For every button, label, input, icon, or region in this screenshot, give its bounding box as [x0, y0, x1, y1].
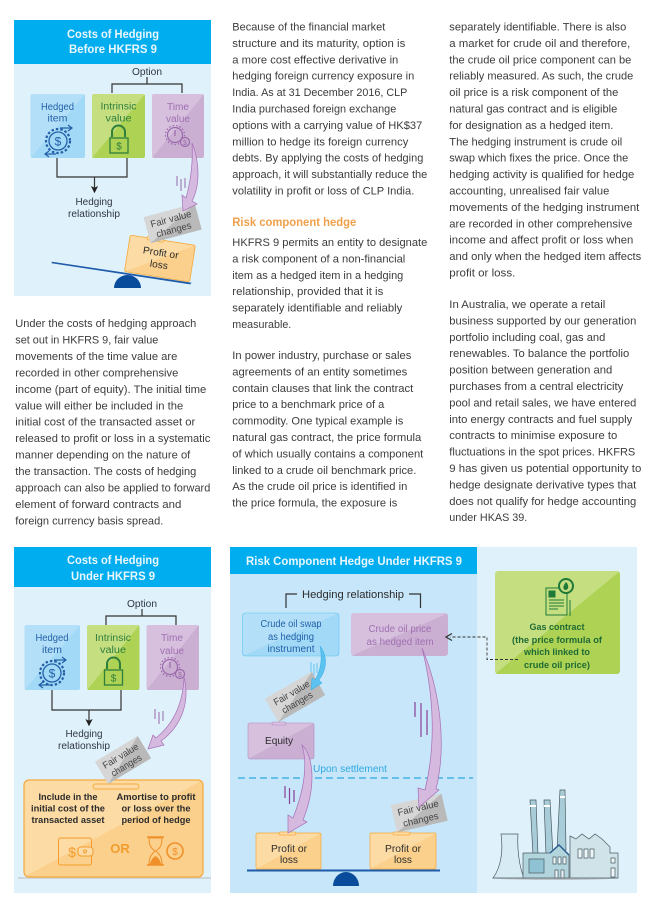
text block: crude oil component: movements of the hedging instrument [449, 202, 639, 214]
text block: Australia: renewables. To balance the portfolio [449, 348, 629, 360]
connector to hedging relationship: relationship [58, 741, 110, 752]
box: fair value changes: Fair value [149, 209, 193, 230]
text block: costs of hedging approach: approach can also be applied to forward [15, 482, 210, 494]
box: gas contract: (the price formula of [512, 635, 603, 646]
text block: costs of hedging approach: Under the costs of hedging approach [15, 318, 196, 330]
box: fair value changes: changes [280, 690, 315, 716]
option bracket [106, 599, 176, 625]
text block: crude oil component: a market for crude oil and therefore, [449, 38, 630, 50]
box: outcomes: Amortise to profit [116, 792, 196, 803]
text: or: OR [110, 841, 130, 856]
text block: Australia: hedge designate derivative types that [449, 479, 636, 491]
text block: option in India [232, 22, 427, 198]
box: outcomes: or loss over the [122, 804, 190, 814]
connector to hedging relationship [57, 158, 127, 220]
box: time value [146, 625, 199, 690]
text block: option in India: India. As at 31 December 2016, CLP [232, 87, 407, 99]
text block: power industry [232, 350, 423, 510]
box: profit or loss [124, 233, 196, 282]
bracket: hedging relationship: Hedging relationship [302, 589, 404, 601]
option bracket [112, 67, 182, 93]
text block: crude oil component: accounting, unrealised fair value [449, 186, 609, 198]
text block: option in India: volatility in profit or loss of CLP India. [232, 186, 414, 198]
text block: power industry: linked to a crude oil benchmark price. [232, 465, 416, 477]
box: crude oil swap: as hedging [268, 632, 314, 643]
panel: risk component hedge under HKFRS 9 [230, 547, 637, 893]
icon: hourglass and coin: $ [172, 847, 178, 858]
icon: hourglass and coin [147, 837, 183, 865]
text block: costs of hedging approach: initial cost of the transacted asset or [15, 417, 196, 429]
text block: power industry: the price formula, the exposure is [232, 498, 398, 510]
box: fair value changes lower: changes [402, 811, 440, 830]
text block: costs of hedging approach: recorded in other comprehensive [15, 367, 178, 379]
text block: crude oil component: hedging activity is qualified for hedge [449, 169, 634, 181]
motion lines: equity [285, 786, 294, 804]
text block: costs of hedging approach: value will either be included in the [15, 400, 183, 412]
box: hedged item: item [48, 114, 68, 124]
box: fair value changes [95, 736, 151, 784]
icon: stopwatch with coin: $ [178, 672, 182, 679]
box: fair value changes: Fair value [272, 679, 312, 708]
text block: option in India: debts. By applying the costs of hedging [232, 153, 423, 165]
text block: risk component definition: relationship, provided that it is [232, 286, 384, 298]
option bracket: Option [127, 599, 157, 610]
box: time value: value [166, 114, 190, 125]
heading: risk component hedge under HKFRS 9: Risk Component Hedge Under HKFRS 9 [246, 554, 462, 568]
text block: option in India: options with a carrying value of HK$37 [232, 120, 422, 132]
illustration: power plant [492, 790, 618, 880]
heading: costs of hedging under HKFRS 9: Under HKFRS 9 [71, 569, 155, 583]
heading: risk component hedge: Risk component hedge [232, 215, 357, 229]
text block: costs of hedging approach: income (part of equity). The initial time [15, 384, 206, 396]
box: crude oil swap: instrument [268, 644, 315, 655]
text block: crude oil component: The hedging instrument is crude oil [449, 136, 622, 148]
box: intrinsic value: value [100, 645, 126, 656]
text block: crude oil component: oil price is a risk component of the [449, 87, 618, 99]
box: outcomes: initial cost of the [31, 804, 105, 814]
icon: padlock: $ [116, 142, 122, 152]
text block: Australia: fluctuations in the spot prices. HKFRS [449, 447, 635, 459]
box: hedged item: item [42, 645, 62, 656]
heading: costs of hedging before HKFRS 9: Costs of Hedging [67, 27, 159, 41]
box: hedged item: Hedged [36, 633, 68, 644]
text block: risk component definition [232, 237, 427, 331]
connector to hedging relationship: relationship [68, 209, 120, 220]
box: outcomes: Include in the [38, 792, 98, 803]
box: intrinsic value [92, 94, 145, 158]
box: intrinsic value: Intrinsic [95, 633, 131, 644]
text block: option in India: structure and its maturity, option is [232, 38, 406, 50]
motion lines [155, 709, 163, 724]
box: fair value changes: changes [155, 220, 193, 240]
box: crude oil swap: Crude oil swap [260, 619, 322, 630]
box: profit or loss: Profit or [142, 245, 180, 262]
box: time value [152, 94, 204, 158]
box: time value: Time [167, 102, 189, 113]
option bracket: Option [132, 67, 162, 78]
arrow: time value to fair value changes [148, 677, 186, 749]
text block: power industry: In power industry, purchase or sales [232, 350, 412, 362]
text block: costs of hedging approach: released to profit or loss in a systematic [15, 433, 211, 445]
arrow: gas contract to crude oil price [446, 634, 518, 660]
text block: Australia: 9 has given us potential opportunity to [449, 463, 641, 475]
text block: Australia: into energy contracts and fuel supply [449, 414, 633, 426]
box: profit or loss right: loss [394, 855, 412, 866]
text block: power industry: contain clauses that link the contract [232, 383, 413, 395]
text block: Australia: does not qualify for hedge accounting [449, 496, 636, 508]
arrow: time value to fair value changes [182, 143, 198, 211]
text block: Australia: under HKAS 39. [449, 512, 527, 524]
box: time value: value [160, 646, 184, 657]
text block: Australia: pool and retail sales, we have entered [449, 397, 636, 409]
panel: costs of hedging before HKFRS 9 [14, 20, 211, 296]
connector to hedging relationship: Hedging [76, 197, 112, 208]
box: intrinsic value: Intrinsic [100, 102, 136, 112]
text block: costs of hedging approach: element of forward contracts and [15, 499, 181, 511]
arrow: swap to fair value changes [311, 646, 326, 690]
text block: option in India: hedging foreign currency exposure in [232, 71, 414, 83]
box: profit or loss: loss [149, 259, 169, 272]
seesaw [247, 870, 440, 886]
text block: option in India: approach, it will substantially reduce the [232, 169, 427, 181]
arrow: crude price to fair value changes [418, 648, 441, 807]
box: outcomes: transacted asset [32, 815, 105, 826]
text block: Australia: portfolio including coal, gas and [449, 332, 605, 344]
box: intrinsic value [87, 625, 140, 690]
box: profit or loss left: loss [280, 855, 298, 866]
text block: costs of hedging approach: foreign currency basis spread. [15, 515, 163, 527]
text block: power industry: price to a benchmark price of a [232, 399, 385, 411]
box: profit or loss left: Profit or [271, 844, 308, 855]
panel: costs of hedging under HKFRS 9 [14, 547, 211, 893]
text block: Australia: contracts to minimise exposure to [449, 430, 617, 442]
box: intrinsic value: value [106, 114, 132, 124]
text block: risk component definition: HKFRS 9 permits an entity to designate [232, 237, 427, 249]
text block: power industry: agreements of an entity sometimes [232, 366, 408, 378]
box: hedged item [30, 94, 85, 158]
bracket: hedging relationship [286, 589, 420, 608]
text block: Australia: business supported by our generation [449, 315, 636, 327]
text block: risk component definition: measurable. [232, 319, 291, 331]
text block: costs of hedging approach: the transaction. The costs of hedging [15, 466, 196, 478]
text block: Australia: In Australia, we operate a retail [449, 299, 605, 311]
motion lines: crude price [415, 702, 427, 737]
arrow: equity to profit or loss [288, 745, 312, 833]
motion lines: blue [311, 662, 317, 675]
text block: power industry: natural gas contract, the price formula [232, 432, 422, 444]
text block: power industry: As the crude oil price is identified in [232, 481, 407, 493]
connector to hedging relationship [52, 690, 121, 752]
heading: costs of hedging before HKFRS 9: Before HKFRS 9 [69, 42, 157, 56]
box: crude oil price: as hedged item [366, 637, 434, 648]
box: hedged item [24, 625, 80, 690]
box: profit or loss right [370, 832, 436, 869]
box: fair value changes lower: Fair value [397, 799, 440, 819]
box: profit or loss left [256, 832, 321, 869]
motion lines [177, 176, 185, 191]
box: time value: Time [161, 633, 183, 644]
connector to hedging relationship: Hedging [66, 729, 102, 740]
text block: option in India: a more cost effective derivative in [232, 54, 398, 66]
box: crude oil price: Crude oil price [368, 624, 432, 635]
icon: wallet [58, 838, 93, 865]
text block: option in India: India purchased foreign exchange [232, 104, 396, 116]
box: gas contract: Gas contract [530, 622, 585, 633]
text block: Australia: purchases from a central electricity [449, 381, 624, 393]
box: crude oil price [351, 613, 448, 656]
text block: crude oil component: separately identifiable. There is also [449, 22, 626, 34]
text block: costs of hedging approach: movements of the time value are [15, 351, 177, 363]
text block: crude oil component: for designation as a hedged item. [449, 120, 613, 132]
text block: costs of hedging approach [15, 318, 211, 527]
icon: dollar cycle: $ [55, 134, 62, 148]
box: fair value changes lower [391, 793, 448, 832]
text block: Australia [449, 299, 641, 524]
text block: crude oil component: swap which fixes the price. Once the [449, 153, 628, 165]
text block: risk component definition: a risk component of a non-financial [232, 253, 405, 265]
text block: crude oil component: are recorded in other comprehensive [449, 218, 632, 230]
text block: crude oil component: income and affect profit or loss when [449, 235, 633, 247]
box: crude oil swap [242, 613, 339, 656]
box: outcomes [18, 780, 211, 878]
text block: power industry: of which usually contains a component [232, 448, 423, 460]
box: profit or loss right: Profit or [385, 844, 422, 855]
text block: Australia: position between generation and [449, 365, 612, 377]
heading: costs of hedging under HKFRS 9 [14, 547, 211, 587]
heading: costs of hedging under HKFRS 9: Costs of Hedging [67, 553, 159, 567]
text block: option in India: million to hedge its foreign currency [232, 136, 409, 148]
text block: crude oil component: natural gas contract and is eligible [449, 104, 617, 116]
box: fair value changes [265, 672, 325, 722]
box: outcomes: period of hedge [122, 815, 190, 826]
box: fair value changes: Fair value [101, 742, 141, 772]
icon: contract with flame [546, 579, 573, 616]
label: upon settlement: Upon settlement [313, 764, 387, 775]
heading: risk component hedge under HKFRS 9 [230, 547, 477, 574]
heading: costs of hedging before HKFRS 9 [14, 20, 211, 64]
text block: costs of hedging approach: set out in HKFRS 9, fair value [15, 334, 158, 346]
box: equity: Equity [265, 736, 293, 747]
text block: power industry: commodity. One typical example is [232, 416, 404, 428]
icon: wallet: $ [68, 844, 76, 860]
text block: crude oil component [449, 22, 642, 280]
icon: dollar cycle: $ [49, 666, 56, 680]
box: fair value changes: changes [109, 752, 144, 779]
text block: crude oil component: the crude oil price component can be [449, 54, 631, 66]
box: equity [248, 722, 314, 759]
text block: crude oil component: profit or loss. [449, 268, 515, 280]
text block: crude oil component: and only when the hedged item affects [449, 251, 642, 263]
box: fair value changes [144, 203, 202, 243]
icon: stopwatch with coin: $ [183, 140, 187, 147]
icon: padlock: $ [111, 674, 117, 684]
text block: risk component definition: separately identifiable and reliably [232, 303, 403, 315]
text block: crude oil component: reliably measured. As such, the crude [449, 71, 633, 83]
text block: option in India: Because of the financial market [232, 22, 385, 34]
box: gas contract: crude oil price) [524, 660, 590, 671]
seesaw [52, 262, 191, 288]
box: gas contract: which linked to [523, 647, 590, 658]
text block: costs of hedging approach: manner depending on the nature of [15, 450, 191, 462]
dashed settlement line [238, 777, 473, 779]
text block: risk component definition: item as a hedged item in a hedging [232, 270, 403, 282]
box: hedged item: Hedged [41, 102, 74, 113]
box: gas contract [495, 571, 620, 674]
